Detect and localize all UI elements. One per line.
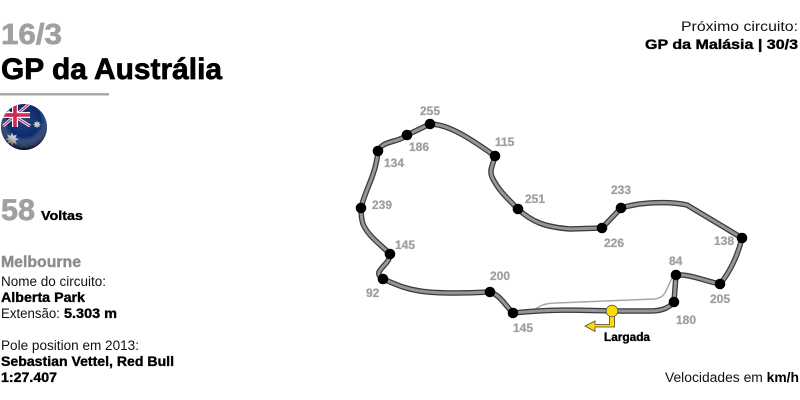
circuit info: Melbourne (1, 254, 81, 271)
speed labels: 84 (669, 254, 683, 268)
start label: Largada (604, 332, 651, 344)
speed labels (366, 104, 734, 335)
speed labels: 226 (604, 236, 624, 250)
laps count: 58 (1, 194, 35, 227)
next circuit: GP da Malásia | 30/3 (645, 37, 799, 52)
speed labels: 115 (495, 135, 515, 149)
circuit map (356, 104, 747, 344)
speed labels: 233 (611, 183, 631, 197)
speed labels: 145 (513, 321, 533, 335)
speed labels: 205 (710, 292, 730, 306)
next circuit: Próximo circuito: (681, 19, 798, 34)
speed labels: 180 (676, 313, 696, 327)
pit lane (530, 278, 672, 312)
laps count (1, 194, 83, 227)
circuit info: Extensão: (1, 306, 60, 321)
title underline (0, 93, 109, 96)
pole position: 1:27.407 (1, 370, 57, 385)
speed labels: 251 (525, 192, 545, 206)
speed labels: 92 (366, 286, 380, 300)
pole position: Sebastian Vettel, Red Bull (1, 354, 174, 369)
circuit info: Alberta Park (1, 290, 86, 305)
circuit info: 5.303 m (64, 306, 117, 321)
pole position (1, 338, 174, 385)
icon: Australian flag (0, 103, 48, 151)
circuit info (1, 254, 117, 321)
title: GP da Austrália (1, 53, 222, 86)
speed labels: 186 (409, 140, 429, 154)
speed labels: 134 (384, 156, 404, 170)
start marker and arrow (585, 305, 618, 332)
speed labels: 200 (490, 269, 510, 283)
speed unit note: Velocidades em km/h (665, 370, 799, 385)
circuit info: Nome do circuito: (1, 274, 106, 289)
speed labels: 138 (714, 234, 734, 248)
track (361, 124, 742, 313)
laps count: Voltas (41, 208, 83, 223)
speed labels: 145 (395, 238, 415, 252)
date: 16/3 (1, 19, 62, 51)
pole position: Pole position em 2013: (1, 338, 139, 353)
speed labels: 255 (420, 104, 440, 118)
speed markers (356, 119, 747, 318)
speed labels: 239 (372, 198, 392, 212)
next circuit (645, 19, 799, 52)
